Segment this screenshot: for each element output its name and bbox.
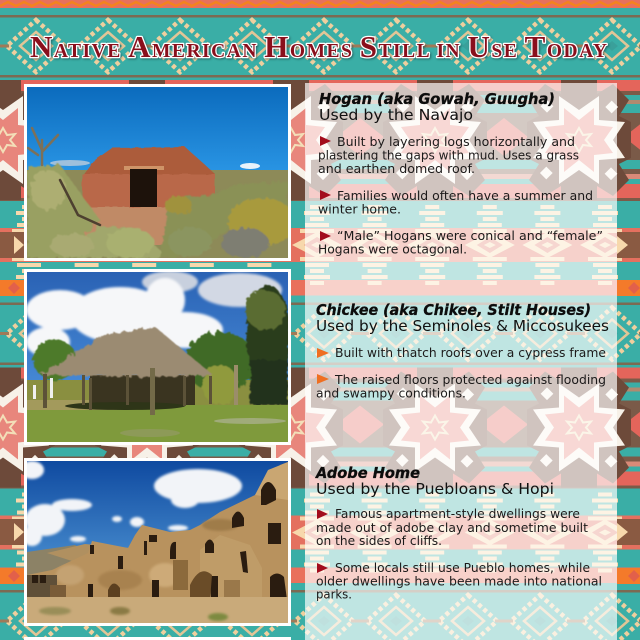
bottom photo frame edge [24, 637, 291, 640]
section: hogan text: “Male” Hogans were conical and “female” [337, 228, 603, 243]
section: hogan text: Built by layering logs horizontally and [337, 134, 575, 149]
section: hogan text: and earthen domed roof. [318, 161, 475, 176]
photo: hogan [24, 84, 296, 261]
section: adobe text: Some locals still use Pueblo homes, while [335, 560, 590, 575]
section: adobe text: Adobe Home [315, 464, 420, 482]
section: hogan text: Hogans were octagonal. [318, 242, 467, 256]
section: adobe text [315, 464, 602, 602]
section: hogan text: Families would often have a summer and [337, 188, 593, 203]
top zigzag border [0, 2, 640, 6]
section: chickee text [316, 301, 609, 400]
section: adobe text: older dwellings have been made into national [316, 574, 602, 588]
section: chickee text: The raised floors protected against flooding [334, 372, 606, 387]
section: chickee text: Chickee (aka Chikee, Stilt Houses) [316, 301, 591, 319]
section: hogan text: winter home. [318, 202, 401, 216]
section: adobe text: Famous apartment-style dwellings were [335, 506, 580, 521]
section: hogan text: plastering the gaps with mud. Uses a grass [318, 148, 579, 162]
section: hogan text: Hogan (aka Gowah, Guugha) [319, 90, 555, 108]
section: adobe text: Used by the Puebloans & Hopi [316, 480, 554, 498]
section: chickee text: Built with thatch roofs over a cypress frame [335, 345, 606, 360]
section: adobe text: on the sides of cliffs. [316, 533, 442, 548]
section: adobe text: parks. [316, 586, 352, 602]
section: adobe text: made out of adobe clay and sometime built [316, 520, 588, 535]
section: hogan text [318, 90, 603, 256]
section: chickee text: and swampy conditions. [316, 386, 466, 400]
title: NATIVE AMERICAN HOMES STILL IN USE TODAY [30, 29, 607, 64]
photo: chickee [24, 269, 291, 445]
orange band accents [0, 280, 640, 584]
section: chickee text: Used by the Seminoles & Miccosukees [316, 317, 609, 335]
photo: adobe [20, 458, 291, 626]
text panel backdrop [305, 83, 617, 640]
section: hogan text: Used by the Navajo [319, 106, 473, 124]
woven band accents [0, 232, 640, 545]
